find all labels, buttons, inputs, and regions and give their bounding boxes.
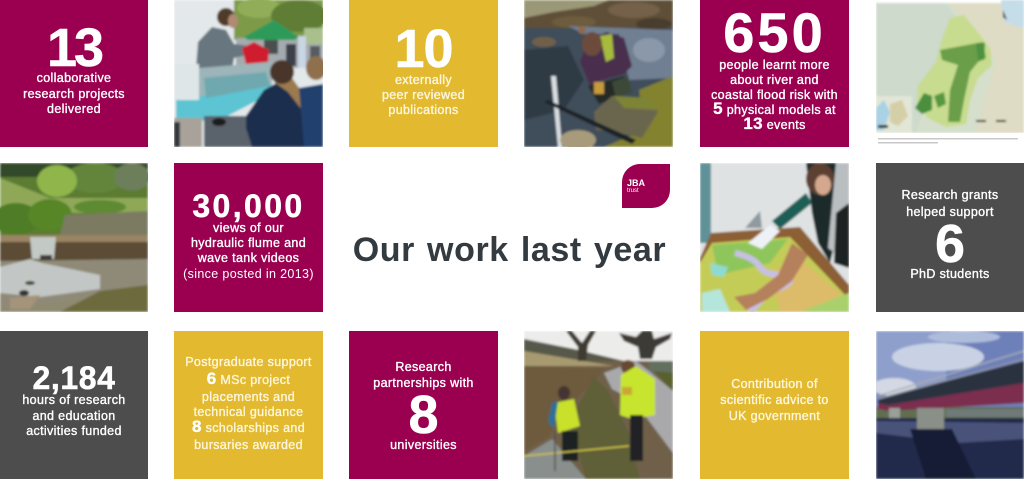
text: collaborative research projects delivered: collaborative	[37, 71, 111, 85]
text: Research grants helped support: helped support	[906, 205, 994, 219]
logo: JBA trust: trust	[627, 188, 639, 194]
number: 13: 13	[47, 18, 101, 78]
text: Research partnerships with	[373, 360, 474, 390]
panel: research partnerships with 8 universities	[349, 331, 498, 479]
text: universities: universities	[390, 438, 457, 452]
text: collaborative research projects delivered: delivered	[47, 102, 101, 116]
text: people learnt more about flood risk: about river and	[730, 73, 819, 87]
text: views of our hydraulic flume and wave tank videos: hydraulic flume and	[191, 236, 306, 250]
text: externally peer reviewed publications: publications	[388, 103, 459, 117]
panel: postgraduate support	[174, 331, 323, 479]
number: 6: 6	[935, 214, 965, 274]
text: Research partnerships with: Research	[395, 360, 452, 374]
text: externally peer reviewed publications	[382, 73, 465, 117]
text: hours of research and education activities funded: activities funded	[26, 424, 122, 438]
logo: JBA trust	[622, 164, 670, 208]
logo: JBA trust: JBA	[627, 178, 645, 188]
text: postgraduate support details: Postgraduate support	[185, 355, 312, 369]
photo: flume demonstration at outdoor event	[174, 0, 323, 147]
text: people learnt more about flood risk: people learnt more	[719, 58, 830, 72]
number: 8: 8	[408, 385, 439, 445]
text: Contribution of scientific advice to UK government: UK government	[729, 409, 820, 423]
text: externally peer reviewed publications: externally	[395, 73, 452, 87]
photo: catchment map	[876, 0, 1024, 147]
text: views of our hydraulic flume and wave tank videos: views of our	[213, 221, 284, 235]
number: 2,184: 2,184	[32, 360, 116, 396]
text: collaborative research projects delivered: research projects	[23, 87, 125, 101]
text: people learnt more about flood risk: coastal flood risk with	[711, 88, 838, 102]
text: postgraduate support details: placements and	[202, 390, 295, 404]
number: 10: 10	[394, 19, 453, 79]
text: postgraduate support details: bursaries awarded	[194, 438, 303, 452]
text: PhD students: PhD students	[910, 267, 990, 281]
text: hours of research and education activities funded: hours of research	[22, 393, 126, 407]
number: 30,000: 30,000	[192, 188, 305, 224]
text: Contribution of scientific advice to UK government	[720, 377, 829, 423]
text: Research grants helped support	[902, 188, 998, 219]
heading: Our work last year: Our work last year	[353, 231, 666, 268]
photo: interactive augmented reality sandbox	[700, 163, 849, 312]
title block with logo	[353, 164, 670, 268]
photo: waterfall in green landscape	[0, 163, 148, 312]
panel: scientific advice to UK government	[700, 331, 849, 479]
text: hours of research and education activities funded: and education	[32, 409, 116, 423]
text: people learnt more about flood risk: 5 physical models at	[713, 99, 836, 118]
text: postgraduate support details: technical guidance	[194, 405, 303, 419]
text: Research grants helped support: Research grants	[902, 188, 998, 202]
text: externally peer reviewed publications: peer reviewed	[382, 88, 465, 102]
panel: 30,000 video views	[174, 163, 323, 312]
text: people learnt more about flood risk: 13 events	[743, 114, 806, 133]
text: hours of research and education activities funded	[22, 393, 126, 438]
text: Contribution of scientific advice to UK government: scientific advice to	[720, 393, 829, 407]
text: people learnt more about flood risk	[711, 58, 838, 133]
text: collaborative research projects delivered	[23, 71, 125, 116]
photo: field survey by roadside	[524, 331, 673, 479]
text: Contribution of scientific advice to UK government: Contribution of	[731, 377, 818, 391]
photo: researcher measuring a stream	[524, 0, 673, 147]
panel: research grants supported 6 PhD students	[876, 163, 1024, 312]
text: views of our hydraulic flume and wave tank videos: wave tank videos	[198, 251, 299, 265]
photo: railway bridge over river	[876, 331, 1024, 479]
panel: 10 peer reviewed publications	[349, 0, 498, 147]
text: postgraduate support details: 8 scholarships and	[192, 417, 305, 436]
panel: 2,184 hours funded	[0, 331, 148, 479]
text: postgraduate support details	[185, 355, 312, 452]
text: views of our hydraulic flume and wave tank videos	[183, 221, 314, 281]
text: views of our hydraulic flume and wave tank videos: (since posted in 2013)	[183, 267, 314, 281]
panel: 650 people learnt more	[700, 0, 849, 147]
number: 650: 650	[723, 1, 826, 64]
text: postgraduate support details: 6 MSc project	[207, 369, 290, 388]
text: Research partnerships with: partnerships with	[373, 376, 474, 390]
panel: 13 collaborative research projects	[0, 0, 148, 147]
